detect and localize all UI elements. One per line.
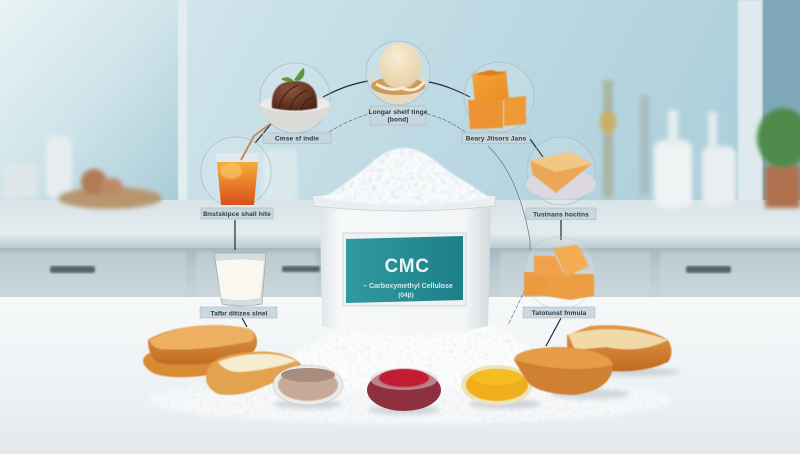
food: round cake right [567,325,672,371]
label: sponge cake: Tustnans hoctins [533,212,589,218]
label: ice cream: Longar shelf tinge [369,109,428,116]
label: ice cream: (bond) [387,116,409,124]
label: orange cubes: Beary Jtisors Jans [466,136,526,142]
label: chocolate dessert [263,133,331,144]
product name: CMC [384,256,430,277]
connector lines [235,81,561,346]
tub body [320,205,491,335]
label: ice cream [369,106,428,125]
label: glass of milk [200,307,277,318]
dish: yellow sauce [461,365,533,405]
label: orange cubes [462,133,530,144]
node: sponge cake on plate [526,137,596,205]
tub rim [312,191,496,211]
node: ice cream [366,41,430,105]
food: tart front [514,347,613,395]
node: chocolate dessert [260,63,330,133]
background kitchen props [4,80,800,209]
label: sponge cake [526,208,596,220]
node: orange cubes [464,62,534,132]
label panel [343,233,466,306]
label: cake cubes: Tatotunst fnmula [532,310,587,317]
food: bread slice [206,352,301,395]
label: orange drink: Bnstskipce shall hite [203,211,271,218]
powder spread on table [148,322,672,424]
product subtitle: – Carboxymethyl Cellulose [363,283,453,290]
dish: tan sauce [273,365,343,405]
product abbreviation: (04β) [398,292,414,299]
powder heap [322,148,490,205]
label: chocolate dessert: Cmse sf indie [275,136,319,142]
label: glass of milk: Tafbr ditizes slnel [210,310,268,318]
table shadows under food [274,368,680,415]
dish: red jam [367,368,441,411]
node: cake cubes [524,237,596,309]
node: glass of milk [214,253,266,306]
node: orange drink [201,124,271,207]
label: orange drink [201,208,273,219]
CMC tub [312,148,496,335]
food: toast stack [143,325,257,377]
label: cake cubes [523,307,595,318]
